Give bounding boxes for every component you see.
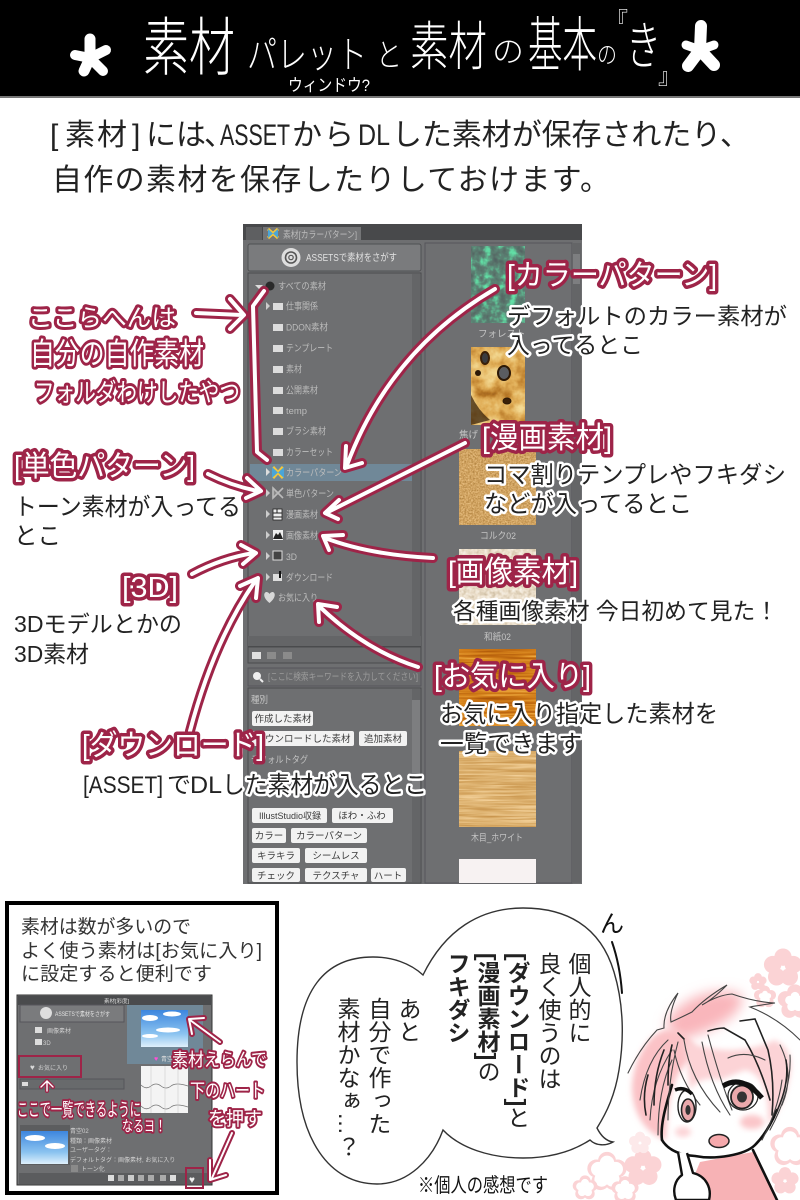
- title: の: の: [597, 42, 617, 69]
- callout: favorites: お気に入り指定した素材を: [440, 701, 718, 728]
- sound effect: ん: [600, 911, 624, 993]
- callout: favorites: 一覧できます: [440, 731, 582, 758]
- mini tree rows: 画像素材: [47, 1027, 71, 1035]
- title: き: き: [626, 18, 661, 76]
- callout: color pattern: デフォルトのカラー素材が: [507, 303, 787, 329]
- assets search button: [248, 244, 421, 271]
- tag buttons: ほわ・ふわ: [338, 811, 386, 822]
- callout: tone pattern: [単色パターン]: [14, 450, 195, 483]
- intro text: 自作の素材を保存したりしておけます。: [52, 164, 610, 197]
- callout: image material: [448, 556, 778, 624]
- small arrow: to sky thumbnail: [189, 1018, 220, 1042]
- mini window screenshot: 青空: [161, 1055, 173, 1063]
- body: [684, 1152, 778, 1200]
- intro text: [: [50, 119, 59, 152]
- callout: 3D: 3Dモデルとかの: [14, 611, 182, 637]
- intro text: ASSET: [220, 119, 290, 152]
- hair colour sides: [632, 1030, 694, 1140]
- tag buttons: ハート: [374, 871, 402, 882]
- tag buttons: テクスチャ: [312, 871, 360, 882]
- mini toolbar: ♥: [189, 1175, 195, 1186]
- title: パレット: パレット: [247, 35, 367, 77]
- row: favorites: [264, 592, 318, 604]
- callout: image material: 各種画像素材 今日初めて見た！: [453, 598, 778, 624]
- tag buttons: キラキラ: [257, 851, 295, 862]
- callout: handwritten own folders note: 自分の自作素材: [30, 338, 204, 371]
- mini preview: 青空02: [70, 1127, 89, 1135]
- intro text: した素材が保存されたり、: [392, 119, 750, 152]
- callout: favorites: [お気に入り]: [434, 660, 591, 693]
- intro text: 、: [204, 119, 234, 152]
- intro text: ]: [132, 119, 140, 152]
- callout: tone pattern: [14, 450, 241, 550]
- note: list here: [17, 1100, 166, 1135]
- mini folder row: [20, 1079, 124, 1089]
- thumbnail: forest: [471, 246, 526, 340]
- callout: 3D: [3D]: [122, 572, 178, 604]
- thumbnail: cork: コルク02: [480, 531, 516, 542]
- title: 素材: 素材: [143, 13, 235, 84]
- note: press heart: 下のハート: [190, 1081, 265, 1102]
- arrow: tone pattern: [208, 474, 261, 498]
- row: download: [266, 571, 333, 584]
- title: と: と: [376, 37, 402, 73]
- tag panel: [248, 688, 421, 883]
- bubble text: column 4: [漫画素材] の: [474, 953, 500, 1083]
- row: tone pattern: 単色パターン: [286, 488, 334, 500]
- note: list here: ここで一覧できるように: [17, 1100, 141, 1120]
- mini window screenshot: ♥: [154, 1056, 158, 1063]
- row: folders: ブラシ素材: [286, 426, 326, 438]
- thumbnail: burnt paper: 焦げ: [459, 429, 479, 441]
- small arrow: to heart button: [210, 1133, 232, 1180]
- arrow: image material: [323, 535, 433, 558]
- tag buttons: シームレス: [312, 851, 360, 862]
- callout: favorites: [434, 660, 718, 758]
- intro text: から: [292, 119, 354, 152]
- bubble text: column 8: 素材かなぁ…？: [334, 997, 360, 1158]
- callout: manga material: [漫画素材]: [482, 422, 612, 455]
- red box: heart button: [186, 1168, 203, 1188]
- hair colour top: [665, 991, 742, 1040]
- note: press heart: を押す: [208, 1108, 262, 1130]
- thumbnail: cork: [459, 449, 536, 542]
- row: folders: テンプレート: [286, 344, 333, 354]
- tip text: 素材は数が多いので: [21, 916, 191, 938]
- callout: manga material: コマ割りテンプレやフキダシ: [484, 462, 786, 489]
- small arrow: to favorites row: [41, 1081, 53, 1091]
- arrow: 3D: [192, 545, 256, 574]
- callout: download: [82, 729, 427, 799]
- mini tree rows: 3D: [43, 1041, 51, 1047]
- callout: 3D: 3D素材: [14, 641, 89, 667]
- note: press heart: 素材えらんで: [172, 1050, 267, 1070]
- right eye: [723, 1082, 762, 1110]
- title banner: [0, 0, 800, 98]
- left eye: [675, 1089, 696, 1122]
- tip text: に設定すると便利です: [21, 963, 212, 985]
- hand: [674, 1152, 710, 1200]
- mini preview: デフォルトタグ：画像素材, お気に入り: [70, 1156, 175, 1164]
- intro text: 素材: [65, 119, 127, 152]
- mini window screenshot: 素材[彩度]: [104, 997, 130, 1005]
- title: close bracket: 』: [658, 64, 680, 89]
- search box: [248, 668, 421, 686]
- tag buttons: カラーパターン: [296, 831, 362, 842]
- tag buttons: [252, 711, 407, 882]
- hair colour bangs: [684, 1040, 791, 1125]
- callout: download: [ダウンロード]: [82, 729, 264, 762]
- mini preview: 種類：画像素材: [70, 1137, 112, 1145]
- callout: download: DL: [190, 772, 222, 799]
- tip text: よく使う素材は[お気に入り]: [21, 940, 262, 962]
- mini window screenshot: ASSETSで素材をさがす: [55, 1009, 110, 1018]
- tag buttons: IllustStudio収録: [259, 810, 321, 821]
- title: 素材: 素材: [410, 17, 487, 76]
- intro text: [50, 119, 750, 197]
- row: image material: [266, 530, 318, 542]
- subtitle note: ウィンドウ?: ウィンドウ?: [288, 76, 370, 95]
- row: manga material: [266, 509, 318, 521]
- mini preview: トーン化: [81, 1165, 105, 1173]
- icon: right star: [686, 26, 714, 66]
- tag panel: デフォルトタグ: [251, 754, 308, 766]
- row: folders: DDON素材: [286, 322, 328, 334]
- selected row: [250, 464, 412, 481]
- row: 3D: 3D: [286, 552, 297, 563]
- row: tone pattern: [266, 488, 334, 500]
- arrow: folder bracket: [253, 291, 267, 460]
- thumbnail: white wood: [459, 751, 536, 844]
- row: color pattern: [266, 467, 342, 479]
- bubble text: column 5: フキダシ: [444, 952, 470, 1044]
- mini graph thumbnail: [141, 1066, 188, 1113]
- intro text: DL: [358, 119, 390, 152]
- thumbnail: burnt paper: [459, 347, 525, 441]
- row: folders: 公開素材: [286, 384, 318, 396]
- note: personal opinion: ※個人の感想です: [418, 1174, 548, 1197]
- row: download: ダウンロード: [286, 572, 333, 584]
- row: all materials: すべての素材: [278, 280, 326, 292]
- row: image material: 画像素材: [286, 530, 318, 542]
- icon: left star: [75, 39, 106, 71]
- callout: download: で: [167, 772, 191, 799]
- mouth: [709, 1134, 729, 1148]
- tree toolbar: [248, 647, 421, 663]
- callout: manga material: [482, 422, 786, 518]
- bubble text: column 2: 良く使うのは: [535, 952, 562, 1090]
- neck and shoulder lines: [753, 1150, 777, 1200]
- panel: favorites tip: [7, 903, 277, 1193]
- arrow: manga material: [325, 443, 465, 519]
- bubble text: column 1: 個人的に: [565, 952, 592, 1044]
- callout: handwritten own folders note: フォルダわけしたやつ: [34, 379, 240, 407]
- tag buttons: カラー: [255, 831, 283, 842]
- note: list here: なるヨ！: [122, 1118, 166, 1135]
- mini tree rows: ♥: [30, 1063, 35, 1072]
- cheek: [740, 1115, 764, 1129]
- row: manga material: 漫画素材: [286, 509, 318, 521]
- callout: download: した素材が入るとこ: [222, 772, 427, 799]
- arrow: to bracket: [196, 299, 244, 329]
- row: folders: 仕事関係: [286, 300, 318, 312]
- speech bubble: [297, 908, 622, 1184]
- callout: color pattern: 入ってるとこ: [507, 332, 643, 358]
- arrow: favorites: [318, 604, 418, 667]
- assets search button: ASSETSで素材をさがす: [306, 251, 397, 264]
- callout: color pattern: [507, 260, 787, 358]
- sound effect: ん: ん: [600, 911, 624, 938]
- mini tree rows: [30, 1027, 71, 1072]
- row: folders: カラーセット: [286, 448, 333, 458]
- row: folders: temp: [286, 406, 307, 417]
- title: の: の: [492, 36, 524, 69]
- row: favorites: お気に入り: [278, 592, 318, 604]
- row: 3D: [266, 551, 297, 563]
- bubble text: column 7: 自分で作った: [365, 997, 392, 1135]
- row: folders: 素材: [286, 364, 302, 376]
- outlines: [628, 985, 800, 1157]
- search box: [ここに検索キーワードを入力してください]: [268, 671, 418, 683]
- mini preview: [20, 1125, 175, 1173]
- background flowers: [573, 948, 800, 1200]
- tag panel: 種別: [251, 695, 268, 706]
- arrow: color pattern: [345, 289, 495, 468]
- title: open bracket: 『: [606, 8, 628, 33]
- mini preview: ユーザータグ：: [70, 1146, 112, 1154]
- tip text: [21, 916, 262, 985]
- callout: image material: [画像素材]: [448, 556, 578, 589]
- callout: manga material: などが入ってるとこ: [484, 491, 692, 518]
- bubble text: column 3: [ダウンロード] と: [504, 953, 530, 1129]
- callout: tone pattern: トーン素材が入ってる: [14, 494, 241, 521]
- panel: materials window screenshot: [243, 224, 582, 884]
- window tab: [263, 227, 361, 241]
- thumbnail: orange wood: [459, 649, 536, 726]
- tag buttons: チェック: [257, 871, 295, 882]
- thumbnail: washi: 和紙02: [484, 631, 511, 643]
- left cheek: [675, 1127, 691, 1137]
- tag buttons: ダウンロードした素材: [255, 733, 351, 745]
- row: all materials: [255, 280, 326, 292]
- thumbnail panel: [425, 243, 581, 883]
- mini tree rows: お気に入り: [38, 1064, 68, 1072]
- tag buttons: 追加素材: [364, 733, 402, 745]
- bubble text: column 6: あと: [395, 997, 421, 1043]
- character illustration: [628, 985, 800, 1200]
- mini toolbar: [19, 1173, 211, 1186]
- callout: download: [ASSET]: [83, 772, 163, 799]
- title: 基本: 基本: [528, 14, 597, 79]
- intro text: には: [146, 119, 206, 152]
- callout: 3D: [14, 572, 182, 667]
- callout: tone pattern: とこ: [14, 523, 61, 550]
- thumbnail: white pattern: [459, 859, 536, 883]
- row: color pattern: カラーパターン: [286, 468, 342, 479]
- note: press heart: [172, 1050, 267, 1130]
- thumbnail: washi: [459, 549, 536, 643]
- tag buttons: 作成した素材: [254, 713, 312, 725]
- mini window screenshot: [17, 995, 212, 1186]
- callout: handwritten own folders note: [28, 305, 240, 407]
- callout: handwritten own folders note: ここらへんは: [28, 305, 176, 332]
- tree panel: [248, 273, 421, 646]
- window tab: 素材[カラーパターン]: [283, 229, 357, 241]
- callout: color pattern: [カラーパターン]: [507, 260, 717, 292]
- thumbnail: forest: フォレスト: [478, 329, 526, 340]
- red box: favorites row: [19, 1056, 81, 1077]
- arrow: download: [190, 578, 258, 731]
- mini sky thumbnail: [141, 1010, 188, 1047]
- thumbnail: white wood: 木目_ホワイト: [471, 832, 523, 844]
- row: folders: [266, 300, 333, 458]
